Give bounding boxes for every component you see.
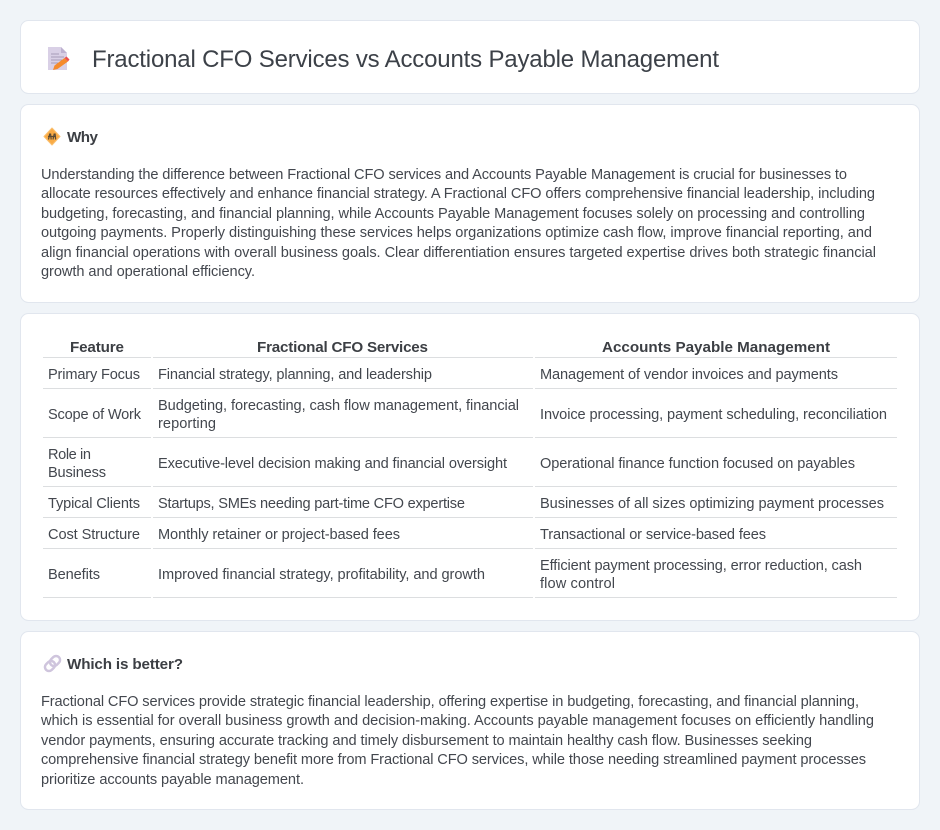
text block: which is better paragraph: Fractional CFO services provide strategic financial leadership, offering expertise in budgeting, forecasting, and financial planning,: [41, 694, 859, 710]
table row: role in business: Role in: [48, 447, 91, 463]
heading: which is better: Which is better?: [67, 656, 183, 673]
table row: benefits: Improved financial strategy, profitability, and growth: [158, 567, 485, 583]
table row: primary focus: Primary Focus: [48, 367, 140, 383]
text block: why paragraph: budgeting, forecasting, and financial planning, while Accounts Payable Management focuses solely on processing and controlling: [41, 206, 865, 222]
text block: which is better paragraph: prioritize accounts payable management.: [41, 772, 304, 788]
table header row: Feature: [70, 339, 124, 356]
panel: why: [20, 104, 920, 302]
table row: benefits: Benefits: [48, 567, 100, 583]
table header row: Accounts Payable Management: [602, 339, 830, 356]
table row: typical clients: Startups, SMEs needing part-time CFO expertise: [158, 496, 465, 512]
panel: comparison table: [20, 314, 920, 620]
table row: benefits: flow control: [540, 576, 615, 592]
text block: which is better paragraph: comprehensive financial strategy benefit more from Fractional CFO services, while those needing streamlined payment processes: [41, 752, 866, 768]
table row: primary focus: Financial strategy, planning, and leadership: [158, 367, 432, 383]
table row: cost structure: Cost Structure: [48, 527, 140, 543]
table row: typical clients: Typical Clients: [48, 496, 140, 512]
text block: why paragraph: Understanding the difference between Fractional CFO services and Accounts Payable Management is crucial for businesses to: [41, 167, 847, 183]
panel: header: [20, 20, 920, 94]
text block: why paragraph: growth and operational efficiency.: [41, 264, 255, 280]
text block: which is better paragraph: [40, 694, 874, 788]
table header row: [70, 339, 830, 356]
table row: benefits: [48, 558, 862, 592]
table row: cost structure: [48, 527, 766, 543]
title: Fractional CFO Services vs Accounts Payable Management: [92, 46, 719, 73]
text block: why paragraph: outgoing payments. Properly distinguishing these services helps organizations optimize cash flow, improve financial reporting, and: [41, 225, 872, 241]
table row: typical clients: [48, 496, 884, 512]
table row: scope of work: Scope of Work: [48, 407, 142, 423]
table row: scope of work: Budgeting, forecasting, cash flow management, financial: [158, 398, 519, 414]
table row: cost structure: Monthly retainer or project-based fees: [158, 527, 400, 543]
table row: typical clients: Businesses of all sizes optimizing payment processes: [540, 496, 884, 512]
panel: which is better: [20, 632, 920, 810]
icon: document with pencil: [48, 47, 70, 70]
table row: scope of work: [48, 398, 887, 432]
table row: role in business: Business: [48, 465, 106, 481]
text block: why paragraph: [41, 167, 876, 280]
text block: which is better paragraph: which is essential for overall business growth and decision-making. Accounts payable management focuses on efficiently handling: [40, 713, 874, 729]
table row: scope of work: reporting: [158, 416, 216, 432]
table row: role in business: Operational finance function focused on payables: [540, 456, 855, 472]
icon: chain link: [43, 654, 62, 673]
table row: role in business: Executive-level decision making and financial oversight: [158, 456, 507, 472]
table row: cost structure: Transactional or service-based fees: [540, 527, 766, 543]
table row: primary focus: [48, 367, 838, 383]
table header row: Fractional CFO Services: [257, 339, 428, 356]
table row: primary focus: Management of vendor invoices and payments: [540, 367, 838, 383]
icon: diamond warning sign: [44, 128, 60, 145]
text block: which is better paragraph: vendor payments, ensuring accurate tracking and timely disbursement to maintain healthy cash flow. Businesses seeking: [41, 733, 812, 749]
table row: role in business: [48, 447, 855, 481]
table row: scope of work: Invoice processing, payment scheduling, reconciliation: [540, 407, 887, 423]
text block: why paragraph: align financial operations with overall business goals. Clear differentiation ensures targeted expertise drives both strategic financial: [41, 245, 876, 261]
text block: why paragraph: allocate resources effectively and enhance financial strategy. A Fractional CFO offers comprehensive financial leadership, including: [41, 186, 875, 202]
table row: benefits: Efficient payment processing, error reduction, cash: [540, 558, 862, 574]
heading: why: Why: [67, 129, 99, 146]
